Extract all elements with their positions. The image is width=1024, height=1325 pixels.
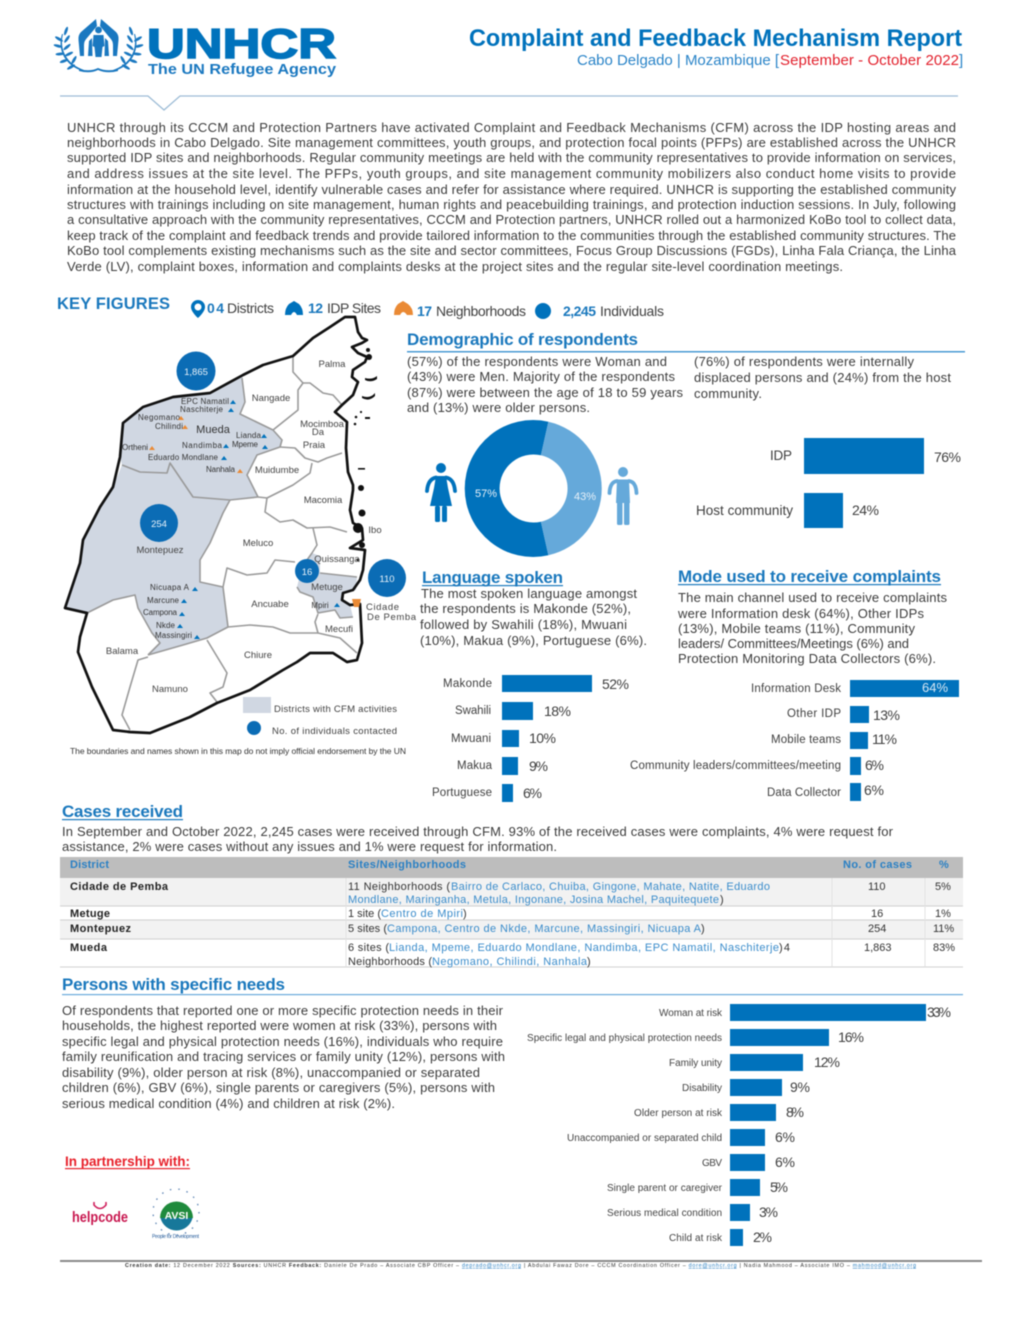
text: language: followed by Swahili (18%), Mwuani [420,617,627,632]
map legend [243,697,397,737]
table: cases by district: Montepuez [70,923,132,935]
logo tagline: The UN Refugee Agency [148,62,336,78]
table: cases by district: 5 sites ( [348,923,387,935]
text: gender and age: and (13%) were older persons. [407,400,590,415]
text: specific needs: specific legal and physical protection needs (16%), individuals who require [62,1034,503,1049]
panel: persons with specific needs [62,975,963,1246]
map: district labels: Macomia [304,495,343,506]
table: cases by district: 11 Neighborhoods ( [348,881,450,893]
table: cases by district: 16 [871,908,883,920]
bar chart: modes: 6% [864,782,884,798]
map: province outline [65,317,367,733]
bar chart: languages: 6% [523,785,542,801]
bar chart: modes: 11% [872,731,897,747]
text: language: (10%), Makua (9%), Portuguese (6%). [420,633,647,648]
bar chart: displacement status: 24% [852,502,879,518]
bar chart: displacement status: Host community [696,503,793,518]
table: cases by district: 11% [933,923,954,935]
text: specific needs: disability (9%), older person at risk (8%), unaccompanied or separated [62,1065,480,1080]
intro paragraph: Verde (LV), complaint boxes, information and complaints desks at the project sites and the regular site-level coordination meetings. [67,259,843,274]
map: district labels: Montepuez [136,545,184,556]
map: site labels [122,397,262,640]
icon: IDP site [285,301,303,315]
bar chart: specific needs: 2% [753,1229,772,1245]
heading: mode: Mode used to receive complaints [678,567,941,586]
text: cases [62,824,894,854]
panel: demographic of respondents [407,330,965,557]
intro paragraph: structures with trainings including on site management, human rights and peacebuilding trainings, and protection induction sessions. In July, following [67,197,956,212]
map: district labels [106,359,417,695]
table: cases by district: Mueda [70,942,108,954]
icon: UNHCR emblem [53,19,144,72]
logo: helpcode: helpcode [72,1209,128,1226]
bar chart: modes: Data Collector [767,787,841,799]
donut chart [465,420,602,557]
map: district labels: Cidade [366,602,399,613]
table: cases by district: 110 [868,881,886,893]
bar chart: specific needs [527,1004,951,1246]
map: district labels: Ancuabe [251,599,289,610]
text: displacement status: community. [694,386,762,401]
table: cases by district: Bairro de Carlaco, Chuiba, Gingone, Mahate, Natite, Eduardo [451,881,770,893]
logo: AVSI [152,1189,200,1240]
map: district labels: Muidumbe [255,465,299,476]
bar chart: modes: 64% [922,680,948,695]
text: mode [677,590,948,666]
intro paragraph: keep track of the complaint and feedback trends and provide tailored information to the communities through the established community structures. The [67,228,956,243]
figure: neighborhoods: Neighborhoods [436,303,526,319]
table: cases by district: Centro de Mpiri [381,908,463,920]
bar chart: specific needs: Single parent or caregiver [607,1183,723,1194]
bar chart: displacement status: IDP [770,448,792,463]
panel: language spoken [420,568,647,802]
map: district labels: Chiure [244,650,272,661]
map disclaimer: The boundaries and names shown in this map do not imply official endorsement by the UN [70,746,406,756]
map: Montepuez district [65,463,230,655]
table: cases by district [60,857,963,968]
text: displacement status [694,354,951,401]
bar chart: specific needs: Serious medical condition [607,1208,722,1219]
text: gender and age: (43%) were Men. Majority of the respondents [407,369,676,384]
map: Metuge district [297,553,357,618]
map: district labels: Palma [319,359,346,370]
map: district labels: Mecufi [325,624,353,635]
map: site labels: Campona [143,608,178,617]
map: bubble Metuge 16: 16 [302,567,312,578]
map: district labels: Meluco [243,538,273,549]
bar chart: specific needs: 8% [786,1104,804,1120]
text: specific needs: children (6%), GBV (6%), single parents or caregivers (5%), persons with [62,1080,495,1095]
bar chart: specific needs: 12% [814,1054,840,1070]
map: site labels: Nandimba [182,441,223,450]
bar chart: languages: Swahili [455,705,491,717]
figure: neighborhoods: 17 [417,303,432,319]
table: cases by district: Metuge [70,908,110,920]
map legend: No. of individuals contacted [272,726,397,737]
bar chart: languages: Makua [457,760,493,772]
bar chart: specific needs: Specific legal and physical protection needs [527,1033,722,1044]
bar chart: specific needs: 6% [775,1154,795,1170]
table: cases by district: % [939,859,949,871]
table: cases by district: ) 4 [779,942,790,954]
figure: IDP sites: IDP Sites [327,300,381,316]
subtitle: ] [959,52,963,69]
map: IDP site markers [177,400,340,639]
text: specific needs: family reunification and tracing services or family unity (12%), persons with [62,1049,505,1064]
map: district labels: Nangade [252,393,290,404]
table: cases by district: Mondlane, Maringanha, Metula, Ingonane, Josina Machel, Paquitequete [348,894,719,906]
bar chart: modes: 6% [865,757,884,773]
bar chart: specific needs: 9% [790,1079,810,1095]
text: mode: The main channel used to receive complaints [678,590,948,605]
bar chart: languages: 52% [602,676,629,692]
icon: neighborhood [394,301,413,315]
logo: UNHCR [53,19,336,78]
icon: individuals [535,303,551,319]
text: displacement status: (76%) of respondents were internally [694,354,914,369]
map: bubble Metuge 16 [295,559,319,583]
heading rule [62,994,963,995]
bar chart: specific needs: Woman at risk [659,1008,723,1019]
heading: language: Language spoken [422,568,563,587]
bar chart: specific needs: GBV [702,1158,722,1169]
map: site labels: Chilindi [155,422,183,431]
bar chart: languages: 18% [544,703,571,719]
bar chart: displacement status [696,438,961,528]
intro paragraph [67,120,957,274]
map: site labels: Massingiri [155,631,192,640]
text: mode: were Information desk (64%), Other IDPs [677,606,924,621]
logo: AVSI: AVSI [165,1210,188,1222]
subtitle: Cabo Delgado | Mozambique [ [577,52,780,69]
map: site labels: Nanhala [206,465,236,474]
heading: key figures: KEY FIGURES [57,295,170,313]
table: cases by district: Cidade de Pemba [70,881,169,893]
map: district borders [87,356,357,730]
map: site labels: Nicuapa A [150,583,190,592]
map: site labels: Eduardo Mondlane [148,453,219,462]
figure: individuals: Individuals [600,303,664,319]
intro paragraph: and address issues at the site level. The PFPs, youth groups, and site management community mobilizers also conduct home visits to provide [67,166,956,181]
bar chart: specific needs: 6% [775,1129,795,1145]
map: district labels: Namuno [152,684,188,695]
bar chart: modes: Community leaders/committees/meeting [630,760,841,772]
map: islands [353,348,377,562]
bar chart: specific needs: Disability [682,1083,722,1094]
footer rule [60,1260,982,1262]
donut chart: 57% [475,488,497,500]
bar chart: languages: 9% [529,758,548,774]
bar chart: specific needs: 5% [770,1179,788,1195]
intro paragraph: KoBo tool complements existing mechanisms such as the site and sector committees, Focus Group Discussions (FGDs), Linha Fala Criança, the Linha [67,243,957,258]
text: specific needs: households, the highest reported were women at risk (33%), persons with [62,1018,497,1033]
bar chart: specific needs: Older person at risk [634,1108,723,1119]
map: district labels: Praia [303,440,326,451]
text: mode: Protection Monitoring Data Collectors (6%). [678,651,936,666]
table: cases by district: Negomano, Chilindi, Nanhala [432,956,588,968]
logo: AVSI: People for Development [152,1234,200,1240]
logo wordmark: UNHCR [147,20,336,67]
header divider [60,96,958,110]
bar chart: languages: 10% [529,730,556,746]
map of Cabo Delgado [65,317,417,756]
text: gender and age: (87%) were between the age of 18 to 59 years [407,385,684,400]
text: specific needs [62,1003,505,1111]
heading: in partnership with: In partnership with: [65,1154,190,1169]
bar chart: modes: 13% [873,707,900,723]
map: district labels: Balama [106,646,139,657]
bar chart: specific needs: Child at risk [669,1233,723,1244]
text: gender and age: (57%) of the respondents were Woman and [407,354,667,369]
text: cases: assistance, 2% were cases without any issues and 1% were request for information. [62,839,557,854]
table: cases by district: ) [701,923,705,935]
intro paragraph: a consultative approach with the community representatives, CCCM and Protection partners, UNHCR rolled out a harmonized KoBo tool to collect data, [67,212,956,227]
figure: districts: Districts [227,300,274,316]
figure: IDP sites: 12 [308,300,323,316]
bar chart: modes: Other IDP [787,708,841,720]
bar chart: languages: Makonde [443,678,492,690]
table: cases by district: 1 site ( [348,908,381,920]
map: site labels: Nkde [156,621,176,630]
intro paragraph: information at the household level, identify vulnerable cases and refer for assistance where required. UNHCR is supporting the established community [67,182,956,197]
text: mode: (13%), Mobile teams (11%), Community [678,621,916,636]
table: cases by district: Neighborhoods ( [348,956,432,968]
map: site labels: Negomano [138,413,181,422]
map: bubble Montepuez 254: 254 [151,519,167,530]
intro paragraph: UNHCR through its CCCM and Protection Partners have activated Complaint and Feedback Mechanisms (CFM) across the IDP hosting areas and [67,120,956,135]
bar chart: specific needs: 3% [759,1204,778,1220]
map: neighborhood markers [149,416,361,607]
bar chart: displacement status: 76% [934,449,961,465]
map: bubble Montepuez 254 [140,504,178,542]
table: cases by district: ) [720,894,724,906]
table: cases by district: District [70,859,109,871]
map: site labels: EPC Namatil [181,397,229,406]
heading: persons with specific needs: Persons with specific needs [62,975,285,994]
text: specific needs: serious medical condition (4%) and children at risk (2%). [62,1096,395,1111]
table: cases by district: Campona, Centro de Nkde, Marcune, Massingiri, Nicuapa A [387,923,702,935]
heading: cases: Cases received [62,802,183,821]
figure: individuals [563,303,664,319]
table: cases by district: 1% [935,908,951,920]
map: district labels: Mocimboa [300,419,345,430]
map: Mueda district [120,375,282,500]
panel: partners [65,1154,200,1240]
icon: man [610,467,636,525]
map: district labels: Quissanga [314,554,360,565]
map: bubble Pemba 110 [368,559,406,597]
table: cases by district: Sites/Neighborhoods [348,859,466,871]
table: cases by district: 254 [868,923,886,935]
intro paragraph: neighborhoods in Cabo Delgado. Site management committees, youth groups, and protection focal points (PFPs) are established across the UNHCR [67,135,956,150]
bar chart: modes: Information Desk [751,683,841,695]
map: site labels: Naschiterje [180,405,224,414]
map legend: Districts with CFM activities [274,704,397,715]
donut chart: 43% [574,491,596,503]
bar chart: languages: Mwuani [451,733,491,745]
map: site labels: Lianda [236,431,262,440]
bar chart: languages [432,675,629,802]
table: cases by district: ) [463,908,467,920]
text: gender and age [407,354,684,415]
table: cases by district: 6 sites ( [348,942,389,954]
table: cases by district: No. of cases [843,859,912,871]
bar chart: specific needs: 33% [927,1004,951,1020]
map: district labels: Ibo [368,525,382,536]
key figures [57,295,664,319]
map: site labels: Ortheni [122,443,148,452]
heading: demographic: Demographic of respondents [407,330,638,349]
table: cases by district: ) [587,956,591,968]
map: bubble Mueda 1,865 [176,352,216,390]
table: cases by district: 83% [933,942,955,954]
bar chart: specific needs: Family unity [669,1058,722,1069]
map: site labels: Marcune [147,596,180,605]
table: cases by district: 1,863 [864,942,892,954]
bar chart: languages: Portuguese [432,787,492,799]
figure: districts: 04 [207,300,224,316]
footer credits: Creation date: 12 December 2022 Sources: UNHCR Feedback: Daniele De Prado – Associate CBP Officer – deprado@unhcr.org | Abdulai Fawaz Dore – CCCM Coordination Officer – dore@unhcr.org | Nadia Mahmood – Associate IMO – mahmood@unhcr.org [125,1263,916,1269]
map: site labels: Mpeme [232,440,259,449]
icon: woman [427,463,455,522]
text: cases: In September and October 2022, 2,245 cases were received through CFM. 93% of the received cases were complaints, 4% were request for [62,824,894,839]
text: language: the respondents is Makonde (52%), [420,601,631,616]
subtitle: September - October 2022 [780,52,959,69]
title: Complaint and Feedback Mechanism Report [469,25,962,52]
figure: individuals: 2,245 [563,303,596,319]
map: bubble Mueda 1,865: 1,865 [184,367,208,378]
subtitle [577,52,963,69]
text: displacement status: displaced persons and (24%) from the host [694,370,951,385]
panel: cases received [60,802,963,968]
text: specific needs: Of respondents that reported one or more specific protection needs in their [62,1003,504,1018]
map: district labels: Metuge [311,582,343,593]
bar chart: specific needs: 16% [838,1029,864,1045]
bar chart: specific needs: Unaccompanied or separated child [567,1133,722,1144]
text: mode: leaders/ Committees/Meetings (6%) and [678,636,909,651]
panel: mode used to receive complaints [630,567,959,801]
bar chart: modes [630,680,959,801]
text: language [420,586,647,648]
bar chart: modes: Mobile teams [771,734,841,746]
map: bubble Pemba 110: 110 [379,574,395,585]
map: district labels: Mueda [196,424,231,436]
map: district labels: De Pemba [367,612,417,623]
intro paragraph: supported IDP sites and neighborhoods. Regular community meetings are held with the community representatives to provide information on services, [67,150,956,165]
heading rule [407,351,965,352]
text: language: The most spoken language amongst [421,586,637,601]
icon: pin [191,300,205,318]
table: cases by district: 5% [935,881,951,893]
map: district labels: Da [312,427,325,438]
map: district labels: Mpiri [311,601,329,610]
table: cases by district: Lianda, Mpeme, Eduardo Mondlane, Nandimba, EPC Namatil, Naschiterje [389,942,779,954]
